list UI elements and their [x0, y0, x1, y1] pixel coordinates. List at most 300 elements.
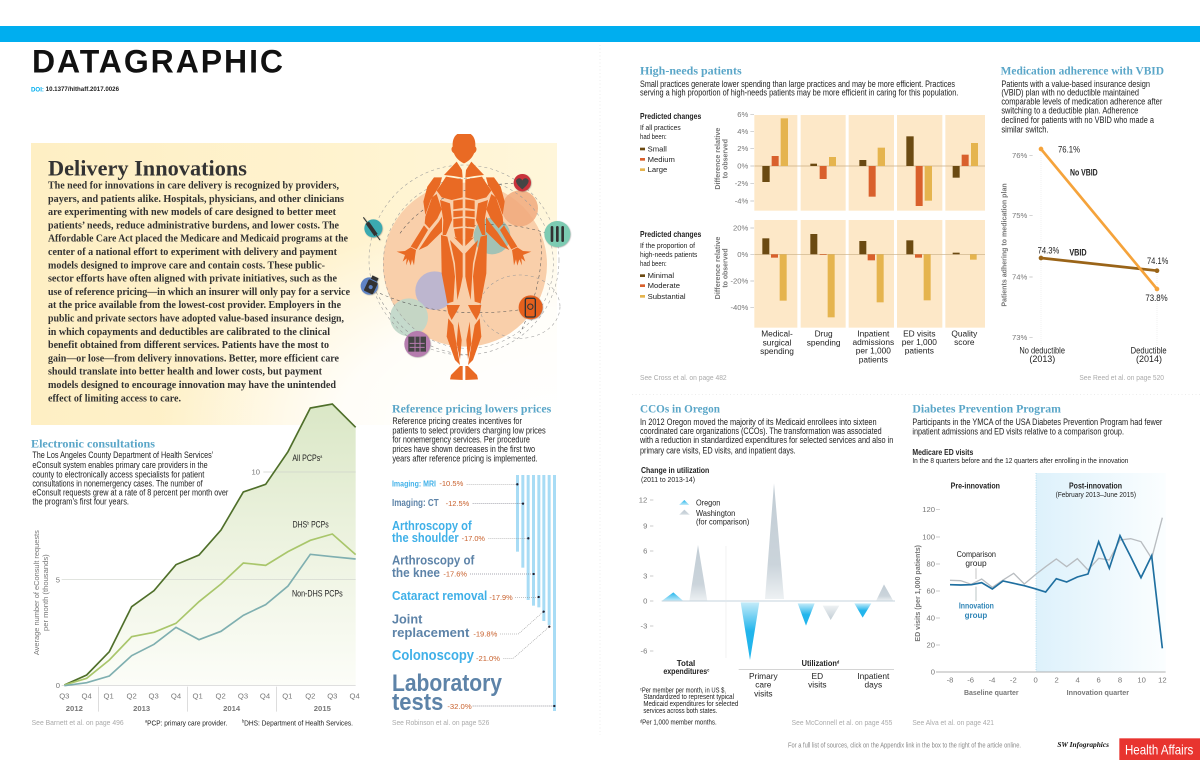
grid lines: [62, 472, 356, 579]
y axis title: Average number of eConsult requests: [32, 530, 41, 655]
intro text block: at the price available from the lowest-cost provider. Employers in the: [48, 300, 341, 311]
y axis numbers: [56, 467, 260, 690]
intro text block: public and private sectors have adopted value-based insurance design,: [48, 314, 344, 324]
chart subtitle: In the 8 quarters before and the 12 quarters after enrolling in the innovation: [912, 458, 1128, 465]
y axis: 60: [926, 586, 935, 595]
legend: practice size: If all practices: [640, 123, 681, 132]
label: comparison group: Comparison: [957, 549, 996, 559]
description: switching to a deductible plan. Adherence: [1001, 106, 1138, 116]
x axis quarter labels: Q3: [149, 691, 159, 700]
top blue band: [0, 26, 1200, 42]
category labels: visits: [808, 679, 827, 689]
category labels: score: [954, 337, 975, 347]
item: shoulder: [392, 518, 485, 545]
zero divider: [1035, 473, 1037, 672]
y axis top: -2%: [735, 179, 749, 188]
data labels: 74.3%: [1038, 245, 1059, 255]
x axis numbers: -4: [989, 675, 996, 684]
item: knee: Arthroscopy of: [392, 552, 475, 567]
icon: syringe: [363, 217, 382, 240]
x axis numbers: 8: [1118, 675, 1122, 684]
item: CT: Imaging: CT: [392, 498, 439, 509]
x axis numbers: 4: [1076, 675, 1081, 684]
intro text block: center of a national effort to experiment with delivery and payment: [48, 247, 338, 258]
y axis top: 0%: [737, 161, 749, 170]
description: Patients with a value-based insurance design: [1001, 79, 1150, 89]
line: no VBID: [1039, 147, 1159, 291]
source: See Cross et al. on page 482: [640, 373, 727, 382]
legend: high-needs proportion: Moderate: [648, 281, 680, 290]
item: joint replacement: [392, 611, 498, 640]
DOI line: DOI: 10.1377/hlthaff.2017.0026: [31, 86, 119, 93]
y axis bottom: [730, 223, 754, 312]
chart subtitle: Medicare ED visits: [912, 447, 974, 457]
y axis title bottom: to observed: [720, 248, 729, 288]
footnotes: Per member per month, in US $.: [642, 687, 726, 694]
y axis top: 4%: [737, 127, 749, 136]
footnote b: b: [242, 718, 245, 723]
x axis quarter labels: Q3: [327, 691, 337, 700]
legend: high-needs proportion: high-needs patients: [640, 250, 697, 259]
category labels: ED visits: [903, 328, 936, 338]
group label: total expenditures: [663, 659, 710, 676]
y axis title: Patients adhering to medication plan: [999, 183, 1008, 307]
credit: SW Infographics: [1057, 740, 1109, 749]
y axis: 100: [922, 532, 935, 541]
orange blob: [502, 190, 538, 226]
x axis numbers: 2: [1055, 675, 1059, 684]
title: DATAGRAPHIC: [32, 44, 283, 80]
triangles: ED visits: [798, 603, 839, 626]
legend: practice size: Predicted changes: [640, 111, 702, 121]
y axis title top: [713, 128, 729, 190]
item: laboratory tests: [392, 670, 503, 716]
chart subtitle: [912, 447, 1128, 465]
x axis numbers: 12: [1158, 675, 1167, 684]
y axis bottom: 0%: [737, 250, 749, 259]
series labels: b: [307, 520, 309, 525]
x axis labels: Deductible: [1131, 345, 1167, 355]
y axis title bottom: [713, 237, 729, 299]
x axis quarter labels: Q3: [238, 691, 248, 700]
chart backgrounds: [754, 115, 985, 328]
group label: utilization: d: [837, 659, 840, 664]
intro text block: in which copayments and deductibles are calibrated to the clinical: [48, 327, 330, 338]
footnote a: a: [145, 718, 148, 723]
period labels: Pre-innovation: [951, 480, 1000, 490]
data labels: 73.8%: [1145, 293, 1168, 303]
source: See Barnett et al. on page 496: [32, 718, 124, 727]
description: eConsult requests grew at a rate of 8 percent per month over: [32, 487, 228, 497]
legend: Washington: [696, 508, 736, 518]
y axis bottom: 20%: [733, 223, 749, 232]
data labels: 74.1%: [1147, 256, 1168, 266]
x axis titles: Innovation quarter: [1067, 688, 1129, 697]
x axis numbers: 10: [1137, 675, 1146, 684]
item: joint replacement: -19.8%: [473, 629, 498, 638]
x axis numbers: -2: [1010, 675, 1017, 684]
x axis quarter labels: [59, 691, 361, 700]
x axis year labels: 2014: [223, 704, 241, 713]
category labels: care: [755, 679, 772, 689]
legend: practice size: [640, 111, 702, 174]
y axis title: [32, 530, 50, 655]
x axis year labels: [66, 704, 332, 713]
illustration: anatomy figure with icons: [361, 134, 570, 380]
y axis top: -4%: [735, 196, 749, 205]
description: county to electronically access specialists for patient: [32, 469, 205, 479]
category labels: patients: [859, 354, 888, 364]
footnotes: d: [640, 718, 643, 723]
y axis top: [735, 110, 754, 205]
category labels: spending: [760, 346, 794, 356]
triangles: inpatient days: [854, 584, 893, 618]
pale teal blob: [390, 298, 428, 336]
item: colonoscopy: -21.0%: [476, 654, 500, 663]
icon: test tubes: [544, 221, 570, 247]
series labels: All PCPs: [292, 453, 328, 463]
y axis top: 2%: [737, 144, 749, 153]
y axis: 76%: [1012, 151, 1028, 160]
x axis: [62, 686, 356, 712]
body: head: [452, 134, 476, 163]
category labels: admissions: [852, 337, 894, 347]
heading: delivery innovations: Delivery Innovations: [48, 156, 247, 180]
y axis: 6: [643, 546, 647, 555]
y axis: 120: [922, 505, 935, 514]
data labels: No VBID: [1070, 167, 1098, 177]
y axis: 75%: [1012, 211, 1028, 220]
intro text block: benefit obtained from different services. Patients have the most to: [48, 340, 329, 351]
source: See Robinson et al. on page 526: [392, 718, 489, 727]
y axis bottom: -20%: [730, 276, 749, 285]
purple blob: [415, 271, 454, 310]
intro text block: use of reference pricing—in which an insurer will only pay for a service: [48, 287, 350, 298]
heading: Reference pricing lowers prices: [392, 401, 552, 415]
body: muscles right half: [465, 162, 531, 380]
body: muscles left half: [397, 162, 463, 380]
label: innovation group: group: [965, 611, 987, 620]
description: similar switch.: [1001, 125, 1049, 135]
connectors: [467, 484, 554, 706]
chart subtitle: (2011 to 2013-14): [641, 475, 695, 484]
y axis title bottom: Difference relative: [713, 237, 722, 299]
category labels: per 1,000: [856, 346, 891, 356]
intro text block: payers, and patients alike. Hospitals, physicians, and other clinicians: [48, 194, 344, 205]
y axis title top: Difference relative: [713, 128, 722, 190]
description: In 2012 Oregon moved the majority of its Medicaid enrollees into sixteen: [640, 417, 877, 427]
x axis labels: (2013): [1029, 354, 1055, 364]
data labels: [1038, 144, 1168, 303]
description: [639, 417, 893, 455]
category labels: spending: [807, 337, 841, 347]
peach circle: [383, 183, 547, 347]
group label: total expenditures: c: [707, 667, 710, 672]
x axis quarter labels: Q4: [171, 691, 182, 700]
panel: diabetes prevention program: [912, 401, 1200, 760]
teal blob: [474, 218, 510, 254]
logo: Health Affairs: [1119, 738, 1200, 760]
label: innovation group: [959, 587, 994, 620]
description: coordinated care organizations (CCOs). The transformation was associated: [640, 426, 882, 436]
item: MRI: Imaging: MRI: [392, 478, 436, 488]
series labels: DHS: [293, 520, 312, 530]
item: knee: [392, 552, 475, 580]
description: for nonemergency services. Per procedure: [392, 434, 530, 444]
markers: [516, 483, 555, 707]
series labels: a: [320, 453, 323, 458]
panel: medication adherence: [999, 63, 1168, 382]
description: [640, 79, 958, 98]
legend: (for comparison): [696, 517, 750, 527]
description: serving a high proportion of high-needs patients may be more efficient in caring for this population.: [640, 88, 958, 98]
category labels: surgical: [763, 337, 791, 347]
legend: [679, 497, 750, 527]
panel: CCOs in Oregon: [639, 401, 895, 727]
description: The Los Angeles County Department of Health Services’: [32, 450, 213, 460]
period labels: [951, 480, 1136, 499]
y axis: 0: [643, 596, 647, 605]
heading: High-needs patients: [640, 64, 742, 78]
x axis year labels: 2015: [314, 704, 332, 713]
y axis: [1012, 151, 1033, 342]
intro text block: are experimenting with new models of care designed to better meet: [48, 207, 337, 218]
category labels: per 1,000: [902, 337, 937, 347]
footnotes: Per 1,000 member months.: [642, 719, 717, 726]
footnotes: [640, 686, 738, 726]
group label: utilization: [739, 659, 894, 670]
description: inpatient admissions and ED visits relative to a comparison group.: [912, 426, 1124, 436]
x axis numbers: 0: [1034, 675, 1038, 684]
footnotes: c: [640, 686, 643, 691]
category labels: ED: [812, 671, 823, 681]
item: CT: -12.5%: [446, 499, 470, 508]
data labels: 76.1%: [1058, 144, 1080, 154]
data labels: VBID: [1069, 248, 1087, 258]
chart subtitle: Change in utilization: [641, 465, 709, 475]
panel: high-needs patients: [640, 64, 985, 382]
item: shoulder: Arthroscopy of: [392, 518, 472, 533]
guides: [1041, 148, 1157, 345]
category labels: days: [865, 679, 882, 689]
y axis title top: to observed: [720, 139, 729, 178]
icon: heart monitor: [514, 174, 531, 191]
label: comparison group: [957, 549, 996, 579]
category labels: Quality: [951, 328, 978, 338]
line: non-DHS PCPs: [64, 554, 356, 686]
orbit lines: [369, 165, 560, 355]
y axis: [922, 505, 1166, 676]
heading: Electronic consultations: [31, 436, 155, 450]
x axis numbers: 6: [1097, 675, 1101, 684]
y axis: 73%: [1012, 333, 1028, 342]
icon: smartphone: [519, 295, 543, 319]
category labels: [760, 328, 978, 364]
legend: high-needs proportion: If the proportion of: [640, 241, 696, 250]
item: cataract: -17.9%: [489, 593, 513, 602]
category labels: Medical-: [761, 328, 793, 338]
group label: total expenditures: expenditures: [663, 667, 713, 676]
x axis labels: [1019, 345, 1167, 364]
y axis numbers: 5: [56, 575, 60, 584]
group label: total expenditures: Total: [677, 659, 695, 668]
series labels: PCPs: [309, 520, 329, 530]
x axis quarter labels: Q4: [350, 691, 361, 700]
legend: high-needs proportion: Minimal: [648, 271, 674, 280]
triangles: total expenditures: [662, 545, 707, 601]
series labels: [292, 453, 343, 598]
panel: delivery innovations: [31, 143, 557, 425]
x axis year labels: 2012: [66, 704, 83, 713]
intro text block: models designed to encourage innovation may have the unintended: [48, 380, 336, 391]
legend: high-needs proportion: had been:: [640, 259, 667, 268]
label: comparison group: group: [965, 558, 987, 568]
y axis numbers: 10: [251, 467, 260, 476]
y axis: 0: [931, 667, 935, 676]
y axis top: 6%: [737, 110, 749, 119]
intro text block: should translate into better health and lower costs, but payment: [48, 367, 323, 378]
label: innovation group: Innovation: [959, 601, 994, 610]
x axis quarter labels: Q1: [282, 691, 292, 700]
description: (VBID) plan with no deductible maintained: [1001, 88, 1139, 98]
description: eConsult system enables primary care providers in the: [32, 460, 208, 470]
description: [392, 416, 546, 463]
legend: practice size: Medium: [648, 155, 675, 164]
x axis titles: Baseline quarter: [964, 688, 1019, 697]
panel: reference pricing: [392, 401, 556, 727]
x axis year labels: 2013: [133, 704, 150, 713]
y axis title: ED visits (per 1,000 patients): [913, 545, 922, 642]
description: primary care visits, ED visits, and inpatient days.: [640, 445, 796, 455]
intro text block: [48, 180, 350, 404]
description: with a reduction in standardized expenditures for selected services and also in: [639, 435, 893, 445]
x axis quarter labels: Q4: [82, 691, 93, 700]
description: Reference pricing creates incentives for: [392, 416, 522, 426]
x axis quarter labels: Q2: [127, 691, 137, 700]
chart subtitle: [641, 465, 709, 484]
chart area fill: [64, 404, 356, 685]
category labels: Drug: [815, 328, 833, 338]
x axis titles: [964, 688, 1129, 697]
description: [1001, 79, 1162, 135]
legend: practice size: Large: [648, 165, 667, 174]
source: See Reed et al. on page 520: [1079, 373, 1164, 382]
y axis: 80: [926, 559, 935, 568]
heading: CCOs in Oregon: [640, 401, 720, 415]
footnote a: PCP: primary care provider.: [147, 718, 227, 727]
source: See Alva et al. on page 421: [912, 718, 994, 727]
item: joint replacement: replacement: [392, 625, 470, 640]
footnotes: Medicaid expenditures for selected: [643, 701, 738, 708]
item: joint replacement: Joint: [392, 611, 423, 626]
x axis quarter labels: Q2: [216, 691, 226, 700]
description: prices have shown decreases in the first two: [392, 444, 535, 454]
description: the program’s first four years.: [32, 497, 129, 507]
icon: pill bottle: [361, 275, 380, 295]
description: Small practices generate lower spending than large practices and may be more efficient. Practices: [640, 79, 955, 89]
icon: hospital: [404, 331, 430, 357]
legend: high-needs proportion: [640, 229, 702, 301]
bar chart: practice size: [754, 118, 985, 206]
category labels: Inpatient: [857, 671, 890, 681]
footnote b: DHS: Department of Health Services.: [244, 718, 353, 727]
y axis: -6: [641, 646, 647, 655]
period labels: (February 2013–June 2015): [1056, 490, 1136, 499]
legend: high-needs proportion: Substantial: [648, 292, 686, 301]
description: [32, 450, 228, 507]
x axis quarter labels: Q4: [260, 691, 271, 700]
category labels: patients: [905, 346, 934, 356]
period labels: Post-innovation: [1069, 480, 1122, 490]
category labels: Inpatient: [857, 328, 890, 338]
line: innovation group: [950, 536, 1162, 648]
description: years after reference pricing is implemented.: [392, 453, 538, 463]
y axis: 20: [926, 640, 935, 649]
item: cataract: Cataract removal: [392, 588, 487, 603]
intro text block: The need for innovations in care delivery is recognized by providers,: [48, 180, 339, 192]
triangles: primary care visits: [741, 483, 784, 660]
line: all PCPs: [64, 404, 356, 685]
bars: [516, 475, 556, 711]
category labels: visits: [754, 688, 773, 698]
x axis numbers: -8: [947, 675, 953, 684]
item: laboratory tests: Laboratory: [392, 670, 503, 697]
item: knee: -17.6%: [443, 569, 467, 578]
intro text block: patients’ needs, reduce administrative burdens, and lower costs. The: [48, 220, 339, 231]
y axis: 3: [643, 571, 647, 580]
y axis numbers: 0: [56, 681, 60, 690]
x axis numbers: [947, 675, 1167, 684]
item: shoulder: the shoulder: [392, 530, 459, 545]
line: comparison group: [950, 518, 1162, 587]
heading: Diabetes Prevention Program: [912, 401, 1061, 415]
x axis quarter labels: Q1: [193, 691, 203, 700]
heading: Medication adherence with VBID: [1001, 63, 1164, 77]
footnotes: services across both states.: [643, 708, 717, 715]
series labels: Non-DHS PCPs: [292, 588, 343, 598]
category labels: [749, 671, 890, 698]
item: laboratory tests: tests: [392, 689, 443, 716]
item: knee: the knee: [392, 565, 440, 580]
y axis: 40: [926, 613, 935, 622]
description: consultations in nonemergency cases. The number of: [32, 478, 203, 488]
y axis: -3: [641, 621, 647, 630]
x axis quarter labels: Q1: [104, 691, 114, 700]
bar chart: high-needs proportion: [754, 234, 985, 317]
line: VBID: [1039, 256, 1159, 273]
intro text block: Affordable Care Act placed the Medicare and Medicaid programs at the: [48, 234, 348, 245]
item: laboratory tests: -32.0%: [447, 702, 472, 711]
y axis: 12: [639, 495, 647, 504]
description: [912, 417, 1162, 436]
x axis labels: (2014): [1136, 354, 1162, 364]
category labels: Primary: [749, 671, 779, 681]
legend: practice size: had been:: [640, 132, 667, 141]
y axis title: per month (thousands): [41, 554, 50, 631]
item: colonoscopy: Colonoscopy: [392, 648, 475, 664]
item: shoulder: -17.0%: [462, 534, 485, 543]
legend: Oregon: [696, 497, 721, 507]
intro text block: effect of limiting access to care.: [48, 393, 181, 404]
description: comparable levels of medication adherence after: [1001, 97, 1162, 107]
intro text block: sector efforts have often aligned with private initiatives, such as the: [48, 274, 337, 285]
x axis quarter labels: Q2: [305, 691, 315, 700]
y axis: 74%: [1012, 272, 1028, 281]
column and section dividers: [600, 45, 1200, 735]
legend: practice size: Small: [648, 144, 667, 153]
group label: utilization: Utilization: [802, 659, 840, 668]
panel: electronic consultations: [31, 404, 361, 727]
